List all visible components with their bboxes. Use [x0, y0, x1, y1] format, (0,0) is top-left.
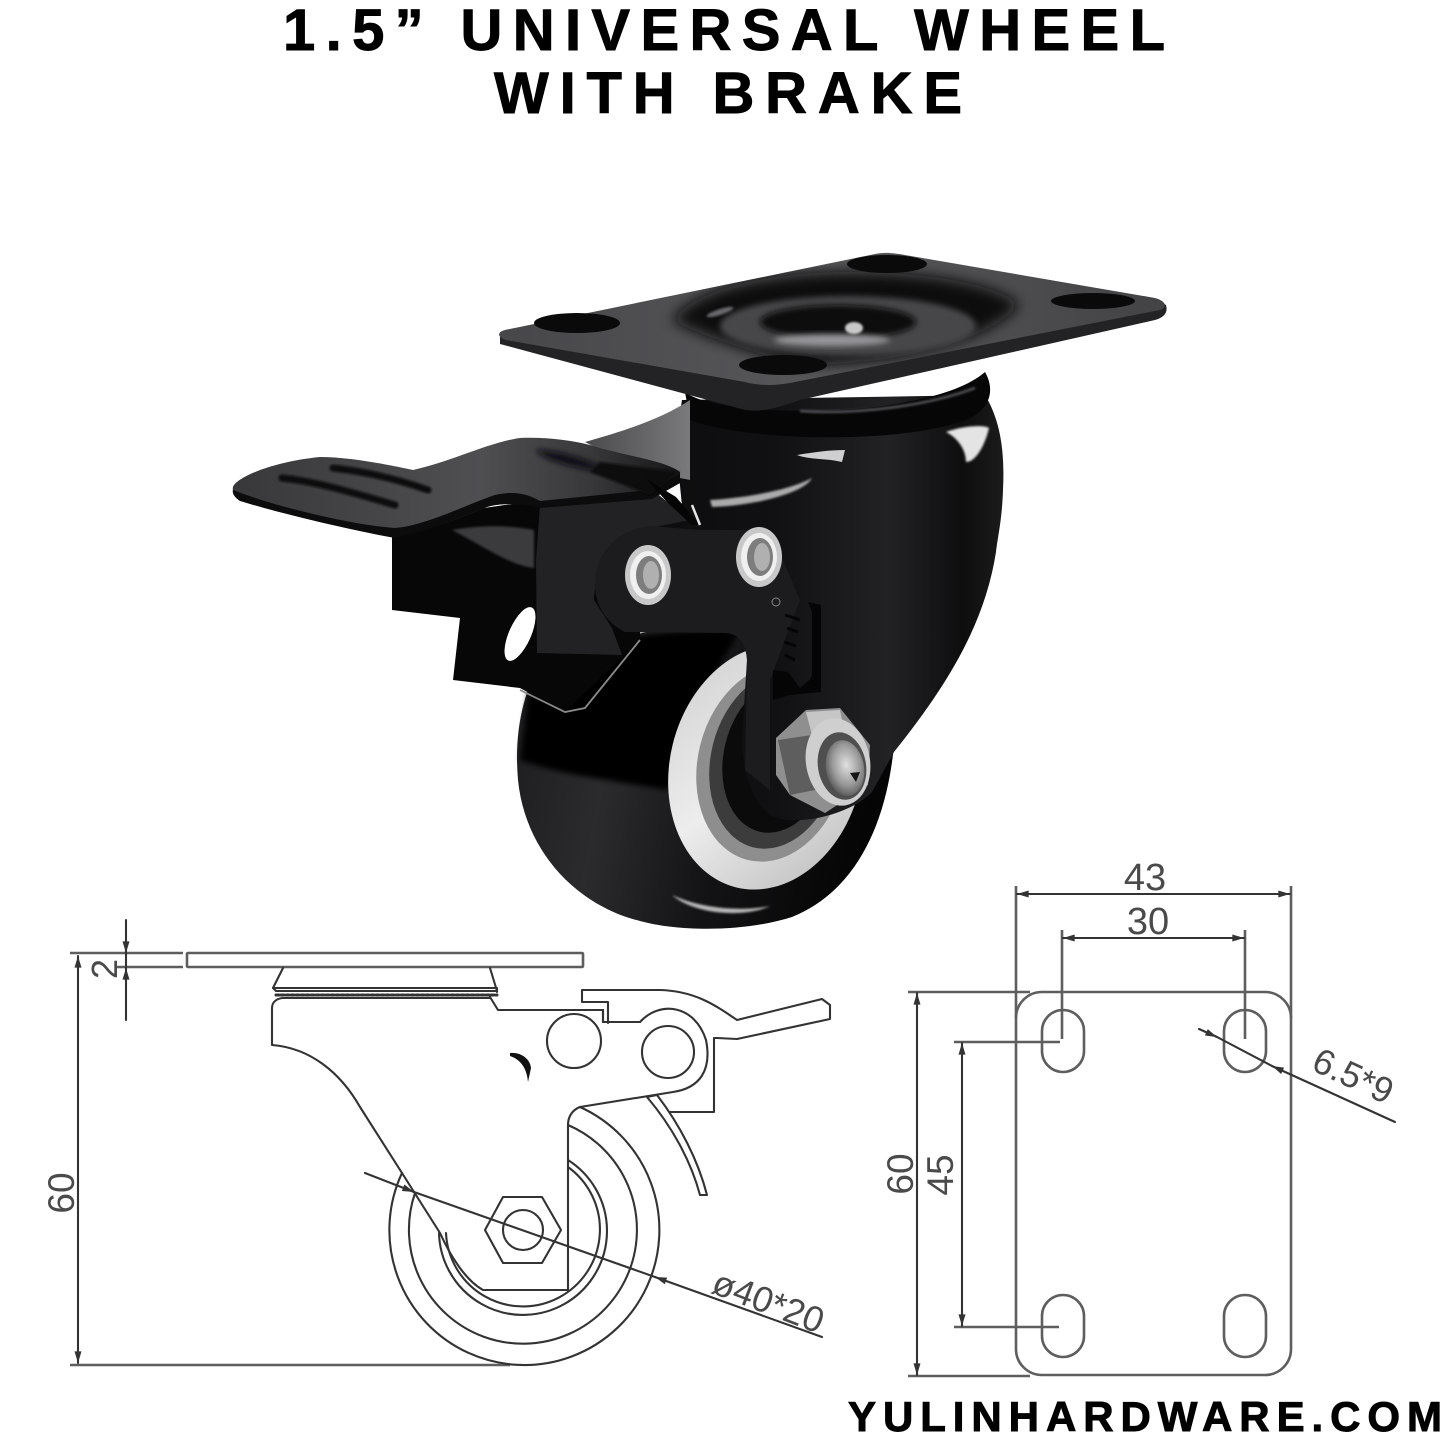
rivet: pivot eyelet [625, 545, 671, 605]
label: wheel diameter: ø40*20 [707, 1261, 830, 1341]
side view technical drawing [41, 920, 830, 1365]
rivet: fork eyelet [736, 527, 782, 587]
website footer: YULINHARDWARE.COM [848, 1393, 1442, 1440]
dimension 30: 30 [1127, 901, 1169, 943]
label: 2: 2 [84, 959, 125, 979]
slot size dimension [1199, 1029, 1400, 1122]
small drawing mark [510, 1053, 531, 1082]
neck collar [685, 372, 990, 437]
slot size dimension: 6.5*9 [1307, 1039, 1400, 1112]
brake slot opening [498, 603, 542, 665]
fork side plate with pivot ear [595, 526, 800, 790]
height and thickness dimensions [70, 920, 510, 1365]
brake lever outline [582, 990, 830, 1112]
brake back plate [585, 400, 690, 480]
title: WITH BRAKE [494, 61, 962, 126]
mounting plate outline [187, 953, 583, 967]
brake spring wire [520, 640, 640, 712]
wheel arcs [389, 1107, 659, 1365]
brand logo mark [772, 598, 821, 700]
title [283, 0, 1165, 126]
hex axle nut [485, 1197, 561, 1263]
brake side bracket [536, 492, 690, 655]
pivot circles [547, 1014, 694, 1078]
dimension 60: 60 [880, 1153, 921, 1195]
product photo: swivel caster with brake [233, 253, 1167, 929]
swivel fork body [594, 395, 1003, 820]
dimension 43: 43 [1124, 857, 1166, 899]
label: 60: 60 [41, 1172, 82, 1214]
brake lower lever [392, 500, 640, 712]
extension lines [908, 886, 1291, 1376]
fork gloss highlights [710, 426, 989, 507]
top mounting plate [499, 253, 1167, 411]
caster wheel [517, 620, 894, 929]
brake pedal [233, 400, 700, 712]
fork body outline [272, 997, 708, 1290]
plate centre boss [672, 272, 1019, 365]
wheel diameter dimension [365, 1173, 822, 1337]
brake pedal plate [233, 438, 680, 537]
axle bolt and nut [776, 708, 877, 813]
swivel flange outline [273, 968, 497, 995]
plate mounting holes [534, 255, 1135, 375]
plate outline [1016, 992, 1291, 1375]
dimension 45: 45 [920, 1154, 961, 1196]
mounting slots [1042, 1010, 1266, 1357]
top view technical drawing [880, 857, 1400, 1376]
brake spring [647, 1095, 707, 1195]
